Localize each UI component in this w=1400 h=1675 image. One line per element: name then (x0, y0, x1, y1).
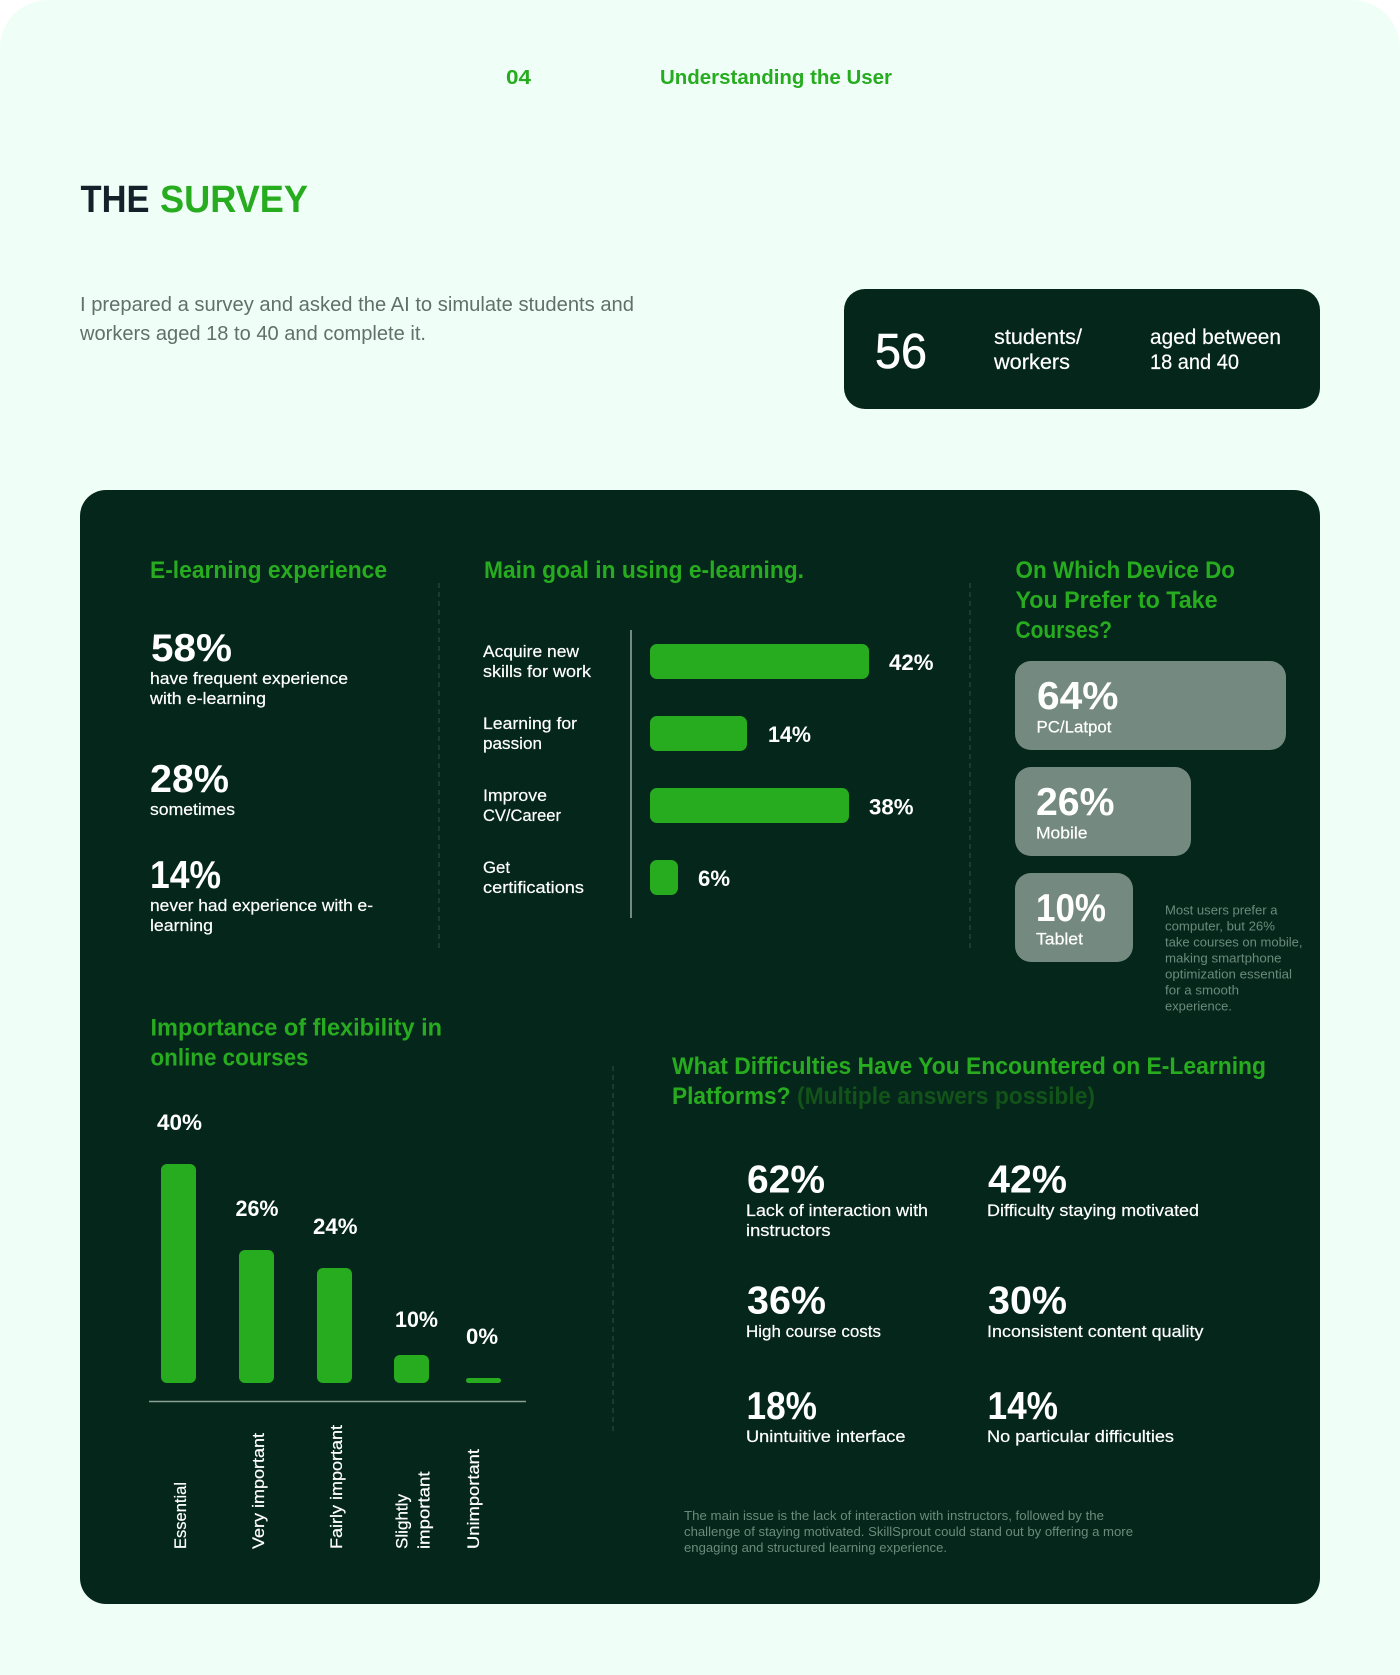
title: THE (80, 179, 150, 221)
stat: 36%: 36% (747, 1280, 826, 1322)
stat: 42%: 42% (988, 1158, 1067, 1202)
stat card: 18 and 40 (1150, 351, 1239, 374)
bar chart: flexibility: Essential (171, 1482, 190, 1549)
bar chart: main goal: Learning for (483, 714, 577, 733)
stat: 30%: 30% (988, 1280, 1067, 1322)
device note: Most users prefer a (1165, 902, 1278, 918)
heading: device preference (1016, 557, 1235, 644)
panel: difficulties (672, 1053, 1266, 1555)
bar chart: flexibility: Very important (249, 1433, 268, 1549)
bar chart: main goal: CV/Career (483, 806, 561, 825)
heading: difficulties: What Difficulties Have You Encountered on E-Learning (672, 1053, 1266, 1080)
difficulties note (684, 1508, 1133, 1555)
device card: Mobile (1015, 767, 1191, 856)
bar chart: flexibility: 40% (157, 1110, 202, 1135)
stat: 58%: 58% (151, 627, 232, 670)
stat: 62%: instructors (746, 1221, 830, 1240)
stat card (844, 289, 1320, 409)
heading: flexibility: online courses (150, 1044, 308, 1072)
panel: device preference (1015, 557, 1302, 1014)
section header (506, 67, 892, 89)
stat: 62% (746, 1158, 928, 1240)
stat: 62%: 62% (747, 1158, 825, 1202)
bar chart: main goal: Improve (483, 786, 547, 805)
stat: 62%: Lack of interaction with (746, 1201, 928, 1220)
section header: 04 (506, 67, 532, 89)
stat: 18%: Unintuitive interface (746, 1427, 906, 1446)
bar chart: flexibility: 26% (236, 1196, 278, 1221)
stat: 30%: Inconsistent content quality (987, 1322, 1204, 1341)
bar chart: flexibility: Slightly (392, 1494, 412, 1549)
stat: 14% (987, 1385, 1174, 1446)
stat: 28% (150, 758, 235, 819)
stat card: students/ (994, 326, 1082, 349)
stat: 18%: 18% (746, 1385, 817, 1428)
stat: 58% (149, 627, 348, 708)
stat card: workers (993, 351, 1070, 374)
stat: 18% (746, 1385, 906, 1446)
title: SURVEY (160, 179, 308, 221)
panel: importance of flexibility (149, 1014, 526, 1549)
bar chart: flexibility: 24% (313, 1214, 358, 1239)
difficulties note: challenge of staying motivated. SkillSprout could stand out by offering a more (684, 1524, 1133, 1539)
device card: PC/Laptop: PC/Latpot (1036, 718, 1112, 736)
bar chart: flexibility: 0% (466, 1324, 498, 1349)
intro text (79, 294, 634, 345)
stat: 14% (150, 854, 373, 935)
panel: survey results (80, 490, 1320, 1604)
stat card: 56 (875, 325, 927, 379)
heading: difficulties (672, 1053, 1266, 1110)
device note: for a smooth (1165, 982, 1239, 998)
heading: e-learning experience: E-learning experience (150, 557, 387, 584)
bar chart: main goal: 38% (869, 794, 914, 820)
bar chart: main goal: 42% (889, 650, 934, 675)
difficulties note: engaging and structured learning experience. (684, 1540, 947, 1555)
stat: 14%: No particular difficulties (987, 1427, 1174, 1446)
stat: 14%: 14% (988, 1385, 1058, 1428)
stat: 58%: with e-learning (149, 689, 266, 708)
stat: 28%: sometimes (150, 800, 235, 819)
panel: main goal (483, 557, 934, 918)
bar chart: main goal: skills for work (483, 662, 592, 681)
stat: 28%: 28% (150, 758, 229, 801)
bar chart: main goal: 6% (698, 866, 730, 891)
bar chart: main goal: 14% (768, 722, 811, 747)
device note: making smartphone (1165, 950, 1282, 966)
device card: Tablet: Tablet (1036, 930, 1083, 948)
bar chart: main goal: Get (483, 858, 510, 877)
heading: device preference: On Which Device Do (1016, 557, 1235, 584)
stat: 30% (987, 1280, 1204, 1341)
stat: 14%: learning (150, 916, 213, 935)
device note: experience. (1165, 998, 1232, 1014)
device card: Tablet: 10% (1036, 887, 1106, 930)
bar chart: flexibility: Unimportant (464, 1449, 483, 1549)
heading: main goal: Main goal in using e-learning. (484, 557, 804, 584)
heading: flexibility (150, 1014, 442, 1072)
stat: 58%: have frequent experience (150, 669, 348, 688)
device note: take courses on mobile, (1165, 934, 1302, 950)
device note (1165, 902, 1302, 1014)
intro text: workers aged 18 to 40 and complete it. (79, 323, 426, 345)
bar chart: flexibility: important (414, 1471, 434, 1549)
stat: 36%: High course costs (746, 1322, 881, 1341)
stat card: aged between (1150, 326, 1281, 349)
heading: device preference: Courses? (1016, 617, 1112, 644)
bar chart: main goal: passion (483, 734, 542, 753)
intro text: I prepared a survey and asked the AI to simulate students and (80, 294, 634, 316)
bar chart: flexibility: Fairly important (327, 1425, 346, 1549)
bar chart: flexibility: 10% (395, 1307, 438, 1332)
heading: device preference: You Prefer to Take (1016, 587, 1218, 614)
panel: e-learning experience (149, 557, 387, 935)
bar chart: main goal: certifications (483, 878, 584, 897)
stat: 14%: never had experience with e- (150, 896, 373, 915)
title (80, 179, 308, 221)
device card: Mobile: 26% (1036, 781, 1114, 824)
device note: computer, but 26% (1165, 918, 1275, 934)
heading: difficulties: Platforms? (672, 1083, 790, 1110)
difficulties note: The main issue is the lack of interaction with instructors, followed by the (684, 1508, 1104, 1523)
device card: Tablet (1015, 873, 1133, 962)
device card: PC/Laptop: 64% (1037, 675, 1118, 718)
bar chart: main goal (483, 630, 934, 918)
heading: difficulties: (Multiple answers possible) (797, 1083, 1095, 1110)
device note: optimization essential (1165, 966, 1292, 982)
section header: Understanding the User (660, 67, 892, 89)
device card: Mobile: Mobile (1036, 824, 1088, 842)
heading: flexibility: Importance of flexibility in (150, 1014, 442, 1042)
bar chart: main goal: Acquire new (483, 642, 580, 661)
device card: PC/Laptop (1015, 661, 1286, 750)
bar chart: flexibility (149, 1110, 526, 1549)
stat: 42% (987, 1158, 1199, 1220)
stat: 36% (746, 1280, 881, 1341)
stat: 14%: 14% (150, 854, 221, 897)
stat: 42%: Difficulty staying motivated (987, 1201, 1199, 1220)
